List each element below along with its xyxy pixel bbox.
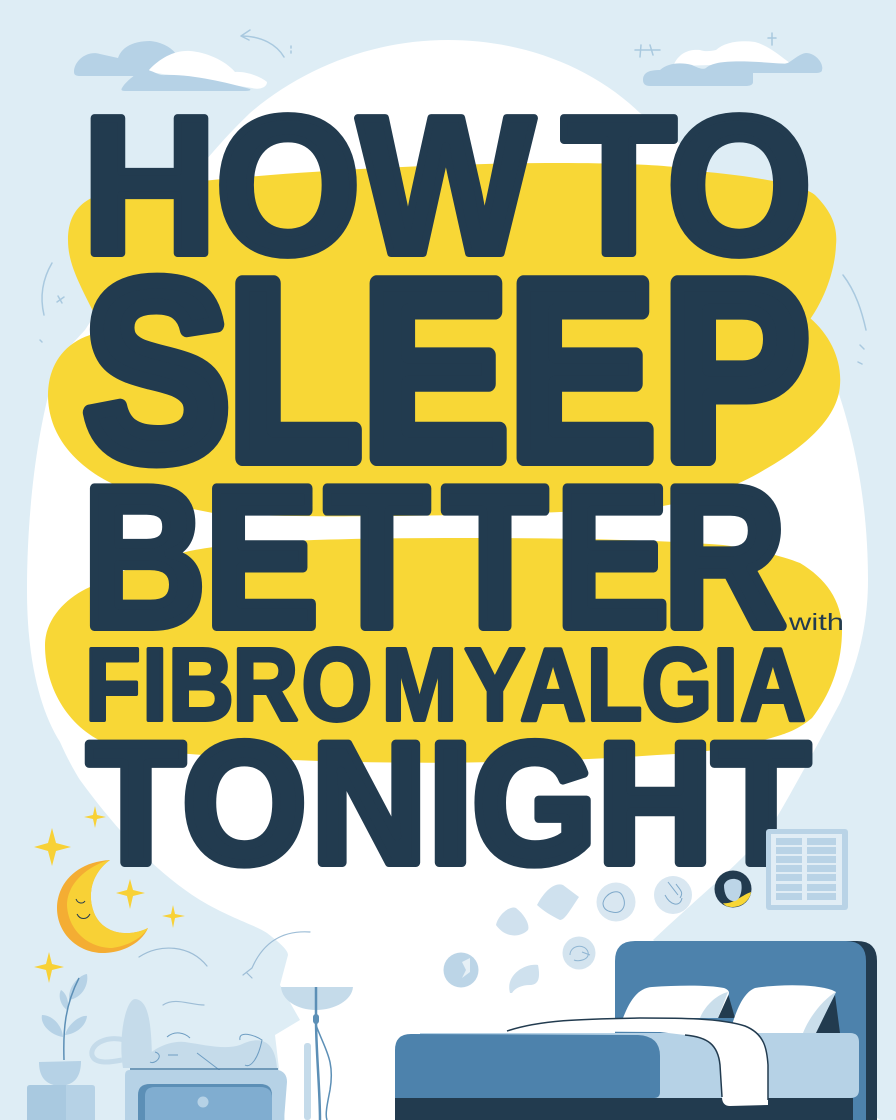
cloud left bbox=[74, 41, 267, 91]
bed base bbox=[395, 1098, 853, 1120]
stars bbox=[34, 806, 185, 983]
dark portrait badge bbox=[714, 870, 752, 908]
bed bbox=[395, 941, 877, 1120]
mattress bbox=[420, 1033, 859, 1098]
cloud right bbox=[643, 41, 822, 86]
dream bubbles bbox=[444, 876, 692, 993]
window vent bbox=[766, 829, 848, 910]
nightstand bbox=[125, 1069, 287, 1120]
moon icon bbox=[57, 860, 148, 953]
sky doodles bbox=[40, 30, 866, 364]
yellow highlight blobs bbox=[45, 163, 842, 763]
title line: SLEEP: SLEEP bbox=[83, 229, 809, 513]
plant bbox=[39, 974, 87, 1086]
floor lamp bbox=[281, 987, 353, 1120]
word: with: with bbox=[788, 609, 844, 635]
pillow shadows bbox=[716, 990, 840, 1033]
title line: BETTER: BETTER bbox=[83, 446, 786, 669]
headboard bbox=[700, 941, 877, 1120]
title line: TONIGHT: TONIGHT bbox=[87, 708, 810, 900]
title bbox=[82, 76, 812, 900]
bird doodles bbox=[139, 932, 310, 1005]
right pillow bbox=[732, 985, 836, 1033]
white sheet bbox=[507, 1018, 768, 1106]
title line: HOW TO: HOW TO bbox=[82, 76, 812, 295]
duvet bbox=[395, 1034, 660, 1098]
sheet outline bbox=[507, 1018, 768, 1100]
left pillow bbox=[623, 986, 729, 1018]
plant stand bbox=[27, 1085, 95, 1120]
title line: FIBROMYALGIA: FIBROMYALGIA bbox=[85, 627, 806, 742]
sleeping figure on nightstand bbox=[92, 999, 277, 1072]
